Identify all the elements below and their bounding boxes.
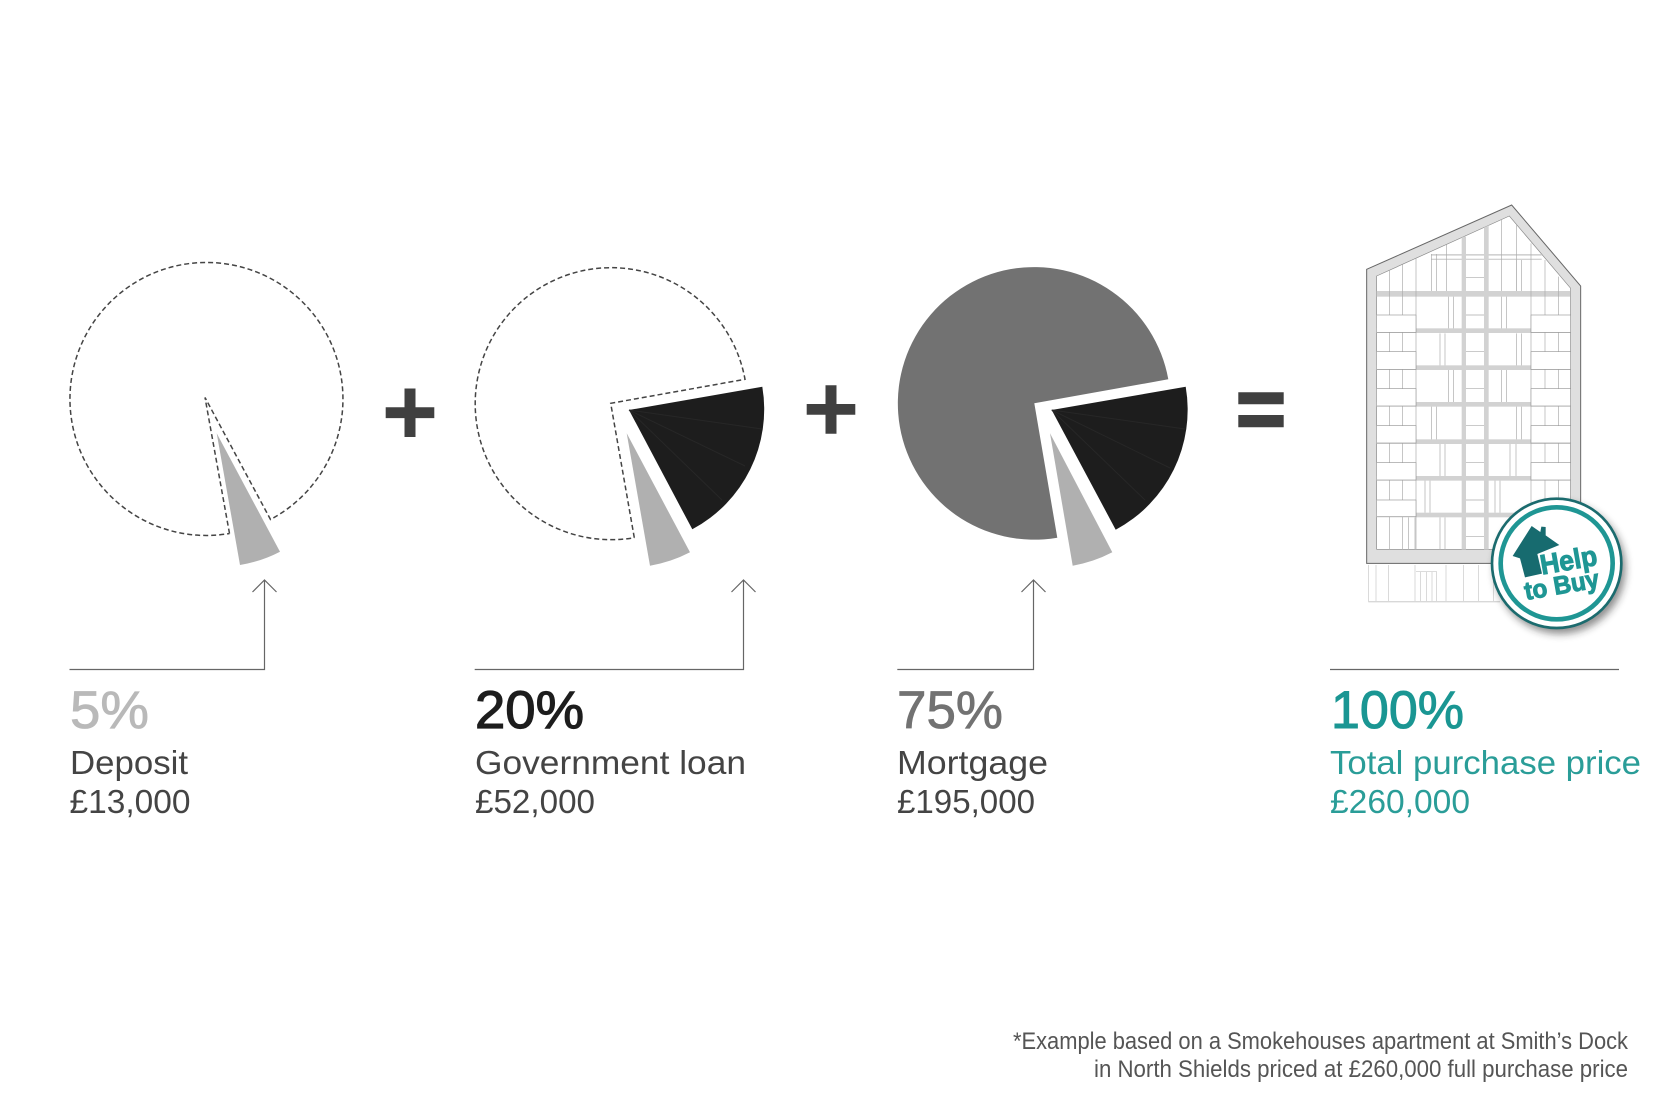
badge text: to Buy [1522,565,1601,606]
badge: Help to Buy [1492,499,1626,634]
pie: deposit 5% [70,262,343,565]
text block: deposit: 5% [70,681,149,740]
plus sign 2 [807,385,855,434]
text block: deposit [70,681,190,820]
rule: total [1330,668,1619,670]
text block: government loan [475,681,746,820]
arrow: mortgage [897,580,1046,670]
text block: total purchase price: £260,000 [1330,783,1470,820]
text block: government loan: 20% [475,681,584,740]
badge text [1522,540,1601,606]
text block: total purchase price: 100% [1331,681,1464,740]
footnote: in North Shields priced at £260,000 full purchase price [1094,1056,1628,1083]
balconies [1377,315,1571,517]
text block: deposit: £13,000 [70,783,190,820]
footnote: *Example based on a Smokehouses apartment at Smith’s Dock [1013,1028,1629,1055]
text block: total purchase price: Total purchase price [1330,744,1641,781]
arrow: deposit [70,580,276,670]
text block: total purchase price [1330,681,1641,820]
text block: mortgage: 75% [897,681,1003,740]
arrow: government loan [475,580,756,670]
footnote [1013,1028,1629,1083]
text block: mortgage: Mortgage [897,744,1048,781]
facade grid [1377,220,1571,550]
text block: mortgage: £195,000 [897,783,1035,820]
building wall [1367,205,1581,563]
text block: mortgage [897,681,1048,820]
building illustration [1367,205,1581,602]
text block: deposit: Deposit [70,744,188,781]
pie: government loan 20% [475,268,764,566]
ground floor [1368,565,1500,602]
badge text: Help [1538,540,1600,581]
plus sign 1 [386,388,434,437]
text block: government loan: £52,000 [475,783,595,820]
text block: government loan: Government loan [475,744,746,781]
icon: house [1513,526,1559,577]
equals sign [1238,392,1284,427]
pie: mortgage 75% [898,267,1188,566]
